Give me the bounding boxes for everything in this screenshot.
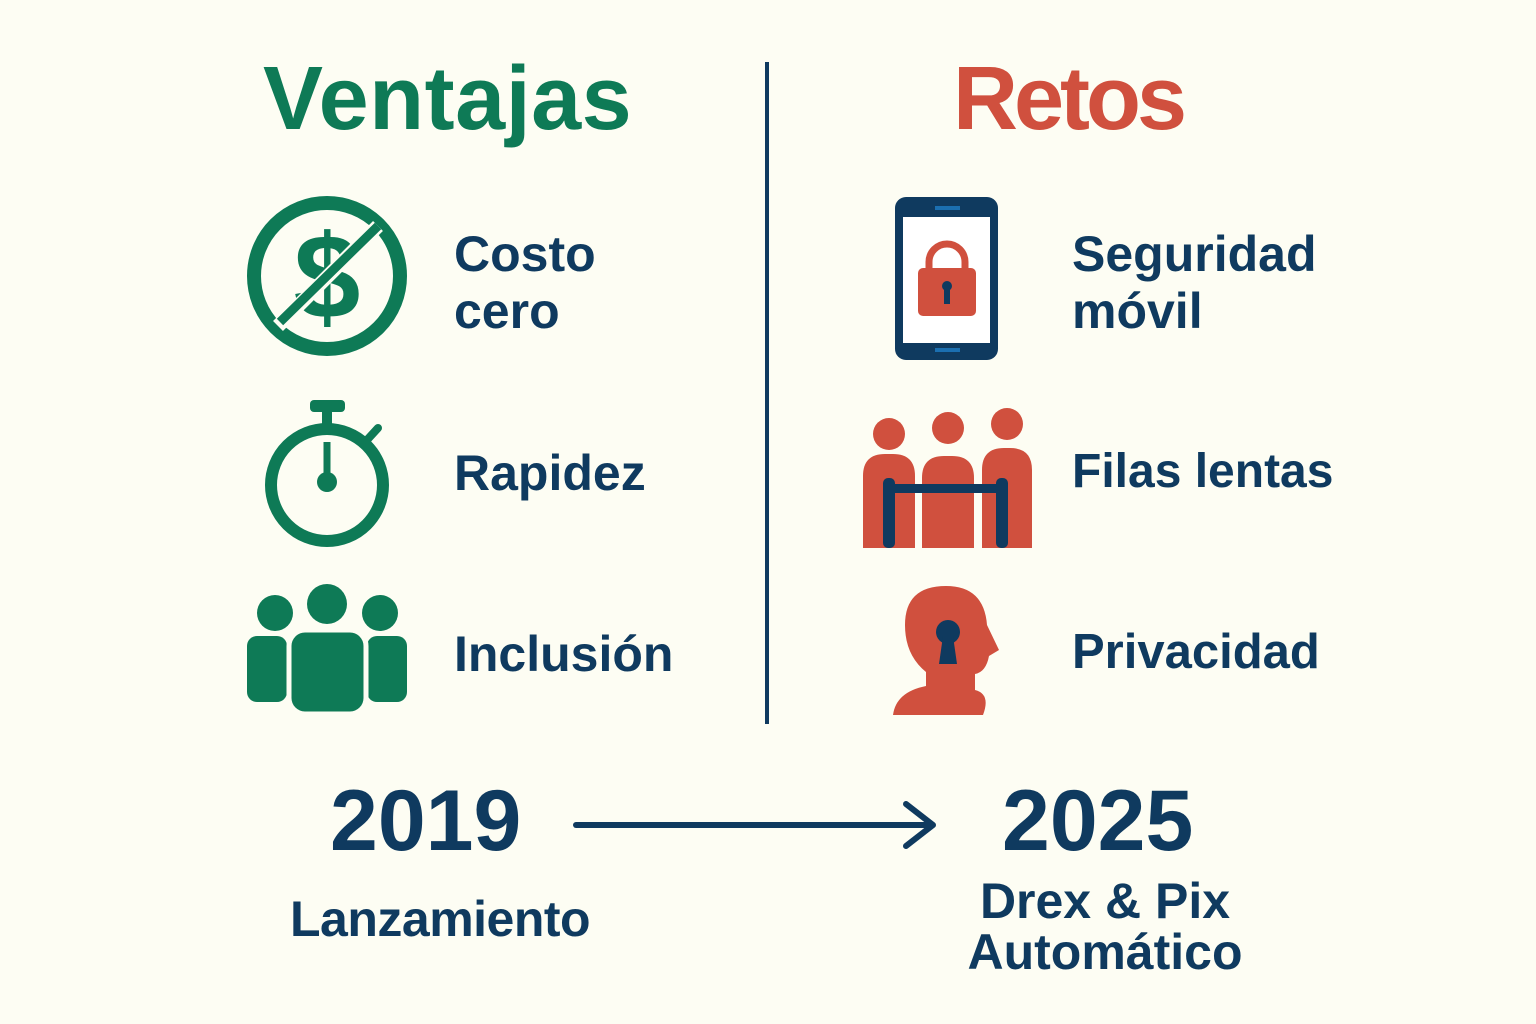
label: Seguridad móvil: móvil [1072,283,1203,339]
icon: queue [863,408,1032,548]
caption: Drex & Pix Automático: Drex & Pix [980,873,1230,929]
icon: no cost [254,203,400,349]
label: Rapidez: Rapidez [454,445,646,501]
icon: phone lock [895,197,998,360]
title: Ventajas: Ventajas [263,49,632,149]
divider [765,62,769,724]
caption: Lanzamiento: Lanzamiento [290,891,590,947]
label: Privacidad: Privacidad [1072,625,1320,679]
arrow [576,804,933,846]
icon: privacy head [893,586,999,715]
title: Retos: Retos [953,49,1183,149]
caption: Drex & Pix Automático [968,873,1242,980]
icon: no cost: $ [294,210,360,344]
caption: Drex & Pix Automático: Automático [968,924,1242,980]
label: Costo cero: cero [454,283,560,339]
year 2025: 2025 [1002,773,1193,869]
icon: people inclusion [247,584,407,714]
label: Inclusión: Inclusión [454,626,673,682]
label: Costo cero: Costo [454,226,596,282]
label: Filas lentas: Filas lentas [1072,445,1333,498]
year 2019: 2019 [330,773,521,869]
label: Seguridad móvil: Seguridad [1072,226,1316,282]
label: Seguridad móvil [1072,226,1316,339]
icon: stopwatch [271,400,383,541]
label: Costo cero [454,226,596,339]
